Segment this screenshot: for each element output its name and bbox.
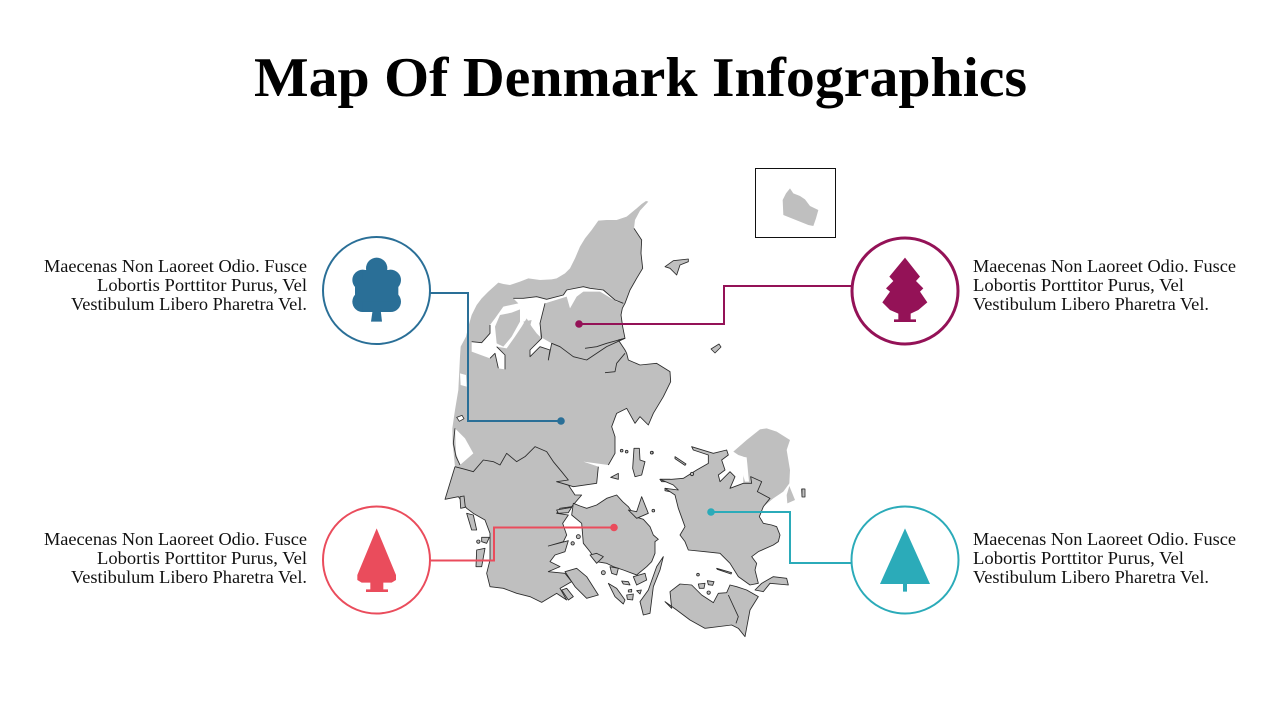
text: bottom right: Lobortis Porttitor Purus, Vel	[973, 548, 1184, 568]
text: top left: Vestibulum Libero Pharetra Vel.	[71, 294, 307, 314]
text: top left: Lobortis Porttitor Purus, Vel	[97, 275, 307, 295]
text: top right	[973, 256, 1236, 314]
connector: red	[431, 524, 618, 560]
connector: teal	[707, 508, 851, 563]
map: small island east of Zealand	[802, 489, 805, 497]
text: bottom right: Vestibulum Libero Pharetra Vel.	[973, 567, 1209, 587]
map: Zealand, Lolland and Falster	[650, 428, 805, 637]
icon: blue round tree	[323, 237, 430, 344]
connector: purple	[575, 286, 851, 328]
connector: blue	[430, 293, 565, 425]
text: bottom left: Maecenas Non Laoreet Odio. Fusce	[44, 529, 307, 549]
map of Denmark	[445, 201, 805, 637]
text: bottom left: Lobortis Porttitor Purus, Vel	[97, 548, 307, 568]
text: bottom left: Vestibulum Libero Pharetra Vel.	[71, 567, 307, 587]
limfjord water	[472, 287, 623, 369]
text: top right: Lobortis Porttitor Purus, Vel	[973, 275, 1184, 295]
icon: teal triangle tree	[852, 506, 958, 614]
text: top right: Vestibulum Libero Pharetra Vel.	[973, 294, 1209, 314]
map: Jutland	[445, 201, 688, 602]
text: top left	[44, 256, 307, 314]
title: Map Of Denmark Infographics	[254, 47, 1027, 109]
inset: Bornholm	[756, 168, 836, 238]
icon: red cone tree	[323, 506, 430, 614]
text: top right: Maecenas Non Laoreet Odio. Fusce	[973, 256, 1236, 276]
text: bottom right: Maecenas Non Laoreet Odio. Fusce	[973, 529, 1236, 549]
text: bottom left	[44, 529, 307, 587]
text: top left: Maecenas Non Laoreet Odio. Fusce	[44, 256, 307, 276]
map: small island	[711, 344, 721, 353]
text: bottom right	[973, 529, 1236, 587]
icon: purple fir tree	[852, 238, 958, 344]
map: Funen and nearby islands	[460, 448, 670, 615]
